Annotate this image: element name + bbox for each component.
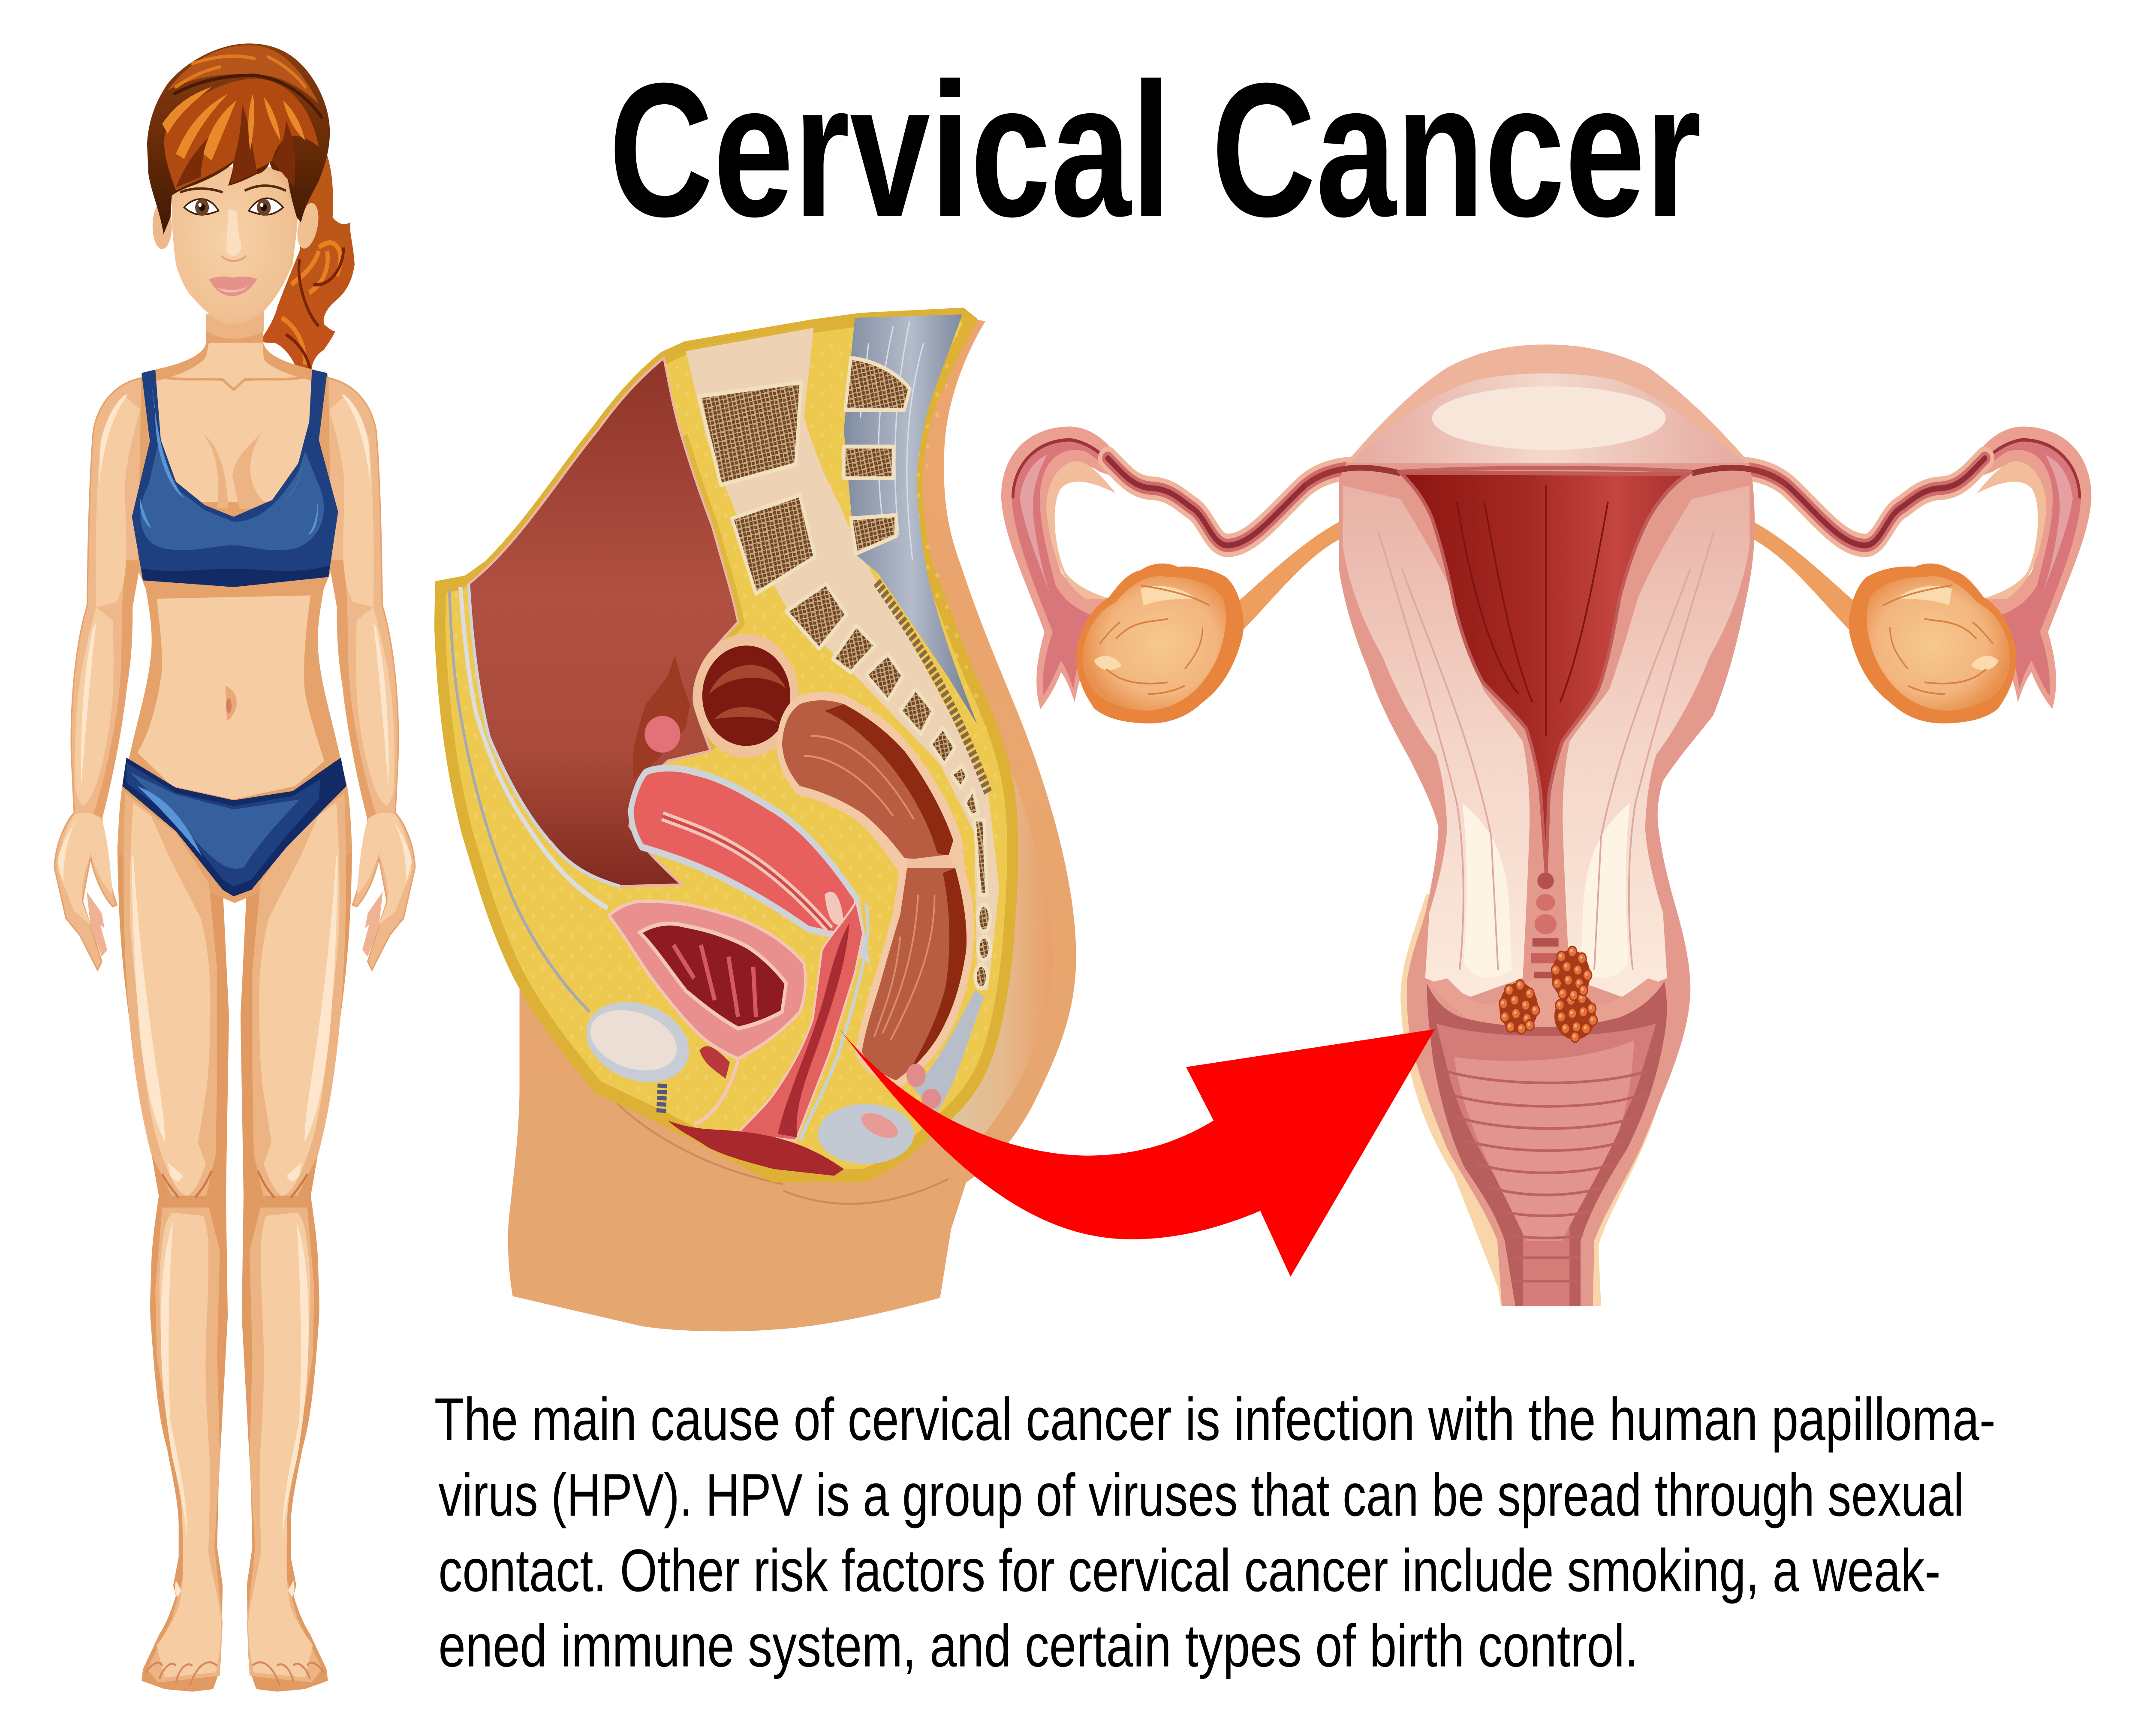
vertebra bodies [699,358,990,989]
hip highlight band [946,736,1053,1141]
nose shadow [221,256,246,261]
sacral canal [877,582,988,793]
small intestine and ovary [633,656,690,779]
lips [209,277,257,296]
lower lip highlight [217,286,247,292]
anatomy: pelvis cross-section [440,314,1076,1331]
tube crossing uterus corner: right [1692,468,1787,485]
cavity lower edge line [469,584,620,886]
dome highlight [1432,386,1666,450]
dome inner [1349,374,1746,463]
cervix lining [1427,978,1666,1027]
description text: contact. Other risk factors for cervical cancer include smoking, a weak- [438,1537,1941,1604]
dome top peach [1346,344,1749,463]
body skin [508,318,1076,1331]
collar line and chest shading [158,376,308,390]
ponytail [260,147,355,392]
bra [132,370,338,587]
vagina [737,901,867,1141]
description text: ened immune system, and certain types of birth control. [438,1612,1638,1679]
vestibule [668,1121,844,1176]
uterus [631,768,866,957]
description text: The main cause of cervical cancer is infection with the human papilloma- [434,1386,1996,1453]
cervical canal beads [1531,873,1560,997]
tube, ligament and ovary: left [1001,426,1391,723]
tumours [1499,946,1598,1043]
spine bone [686,328,999,990]
lumbar region grey [844,314,977,724]
left wall [1343,486,1530,997]
rectum [777,692,974,1089]
abdominal wall light line [461,587,608,908]
uterus silhouette [1339,344,1755,1306]
wall highlights [1462,803,1630,978]
top fat band [686,326,812,361]
tube, ligament and ovary: right [1702,426,2091,723]
vaginal light panel [1454,1040,1634,1241]
coil vessel [661,1084,662,1114]
cream outer edge [1400,893,1670,1306]
wall fibres [1379,532,1714,970]
brows [180,186,286,192]
vaginal lining [1436,1024,1656,1306]
description text [434,1386,1996,1679]
band above cavity [1400,468,1692,472]
left half of body [54,314,235,1692]
vagina [1427,981,1667,1306]
description text: virus (HPV). HPV is a group of viruses that can be spread through sexual [438,1462,1964,1529]
navel centre [226,698,232,713]
eyes [184,198,283,216]
anal sphincter [818,990,984,1164]
skin fold lines [605,1091,949,1204]
anatomy: uterus front view [1001,344,2091,1306]
sigmoid colon [694,634,798,758]
neck shadow [206,308,264,339]
tube crossing uterus corner: left [1306,468,1400,485]
face [153,167,322,325]
abdominal cavity [469,358,738,886]
abdominal wall lines [449,591,590,1012]
briefs [122,758,346,896]
pubic bone [580,990,696,1094]
bladder [609,901,805,1059]
cavity surround [682,437,738,751]
right half of body [235,314,415,1692]
figure: woman [54,43,415,1692]
nose [226,209,241,256]
navel [226,686,237,721]
fat layer [440,314,1013,1176]
urethra tube [694,1060,738,1124]
cavity [1400,473,1688,873]
chest and abdomen skin [138,343,324,799]
right wall [1563,486,1750,997]
hair [147,43,330,234]
urethra [699,1046,730,1079]
fat texture [447,326,1003,1166]
title: Cervical Cancer [609,44,1701,256]
rugae [1443,1070,1649,1281]
cavity folds [1457,485,1608,736]
red arrow [839,1028,1435,1277]
grey fibres [860,321,924,560]
